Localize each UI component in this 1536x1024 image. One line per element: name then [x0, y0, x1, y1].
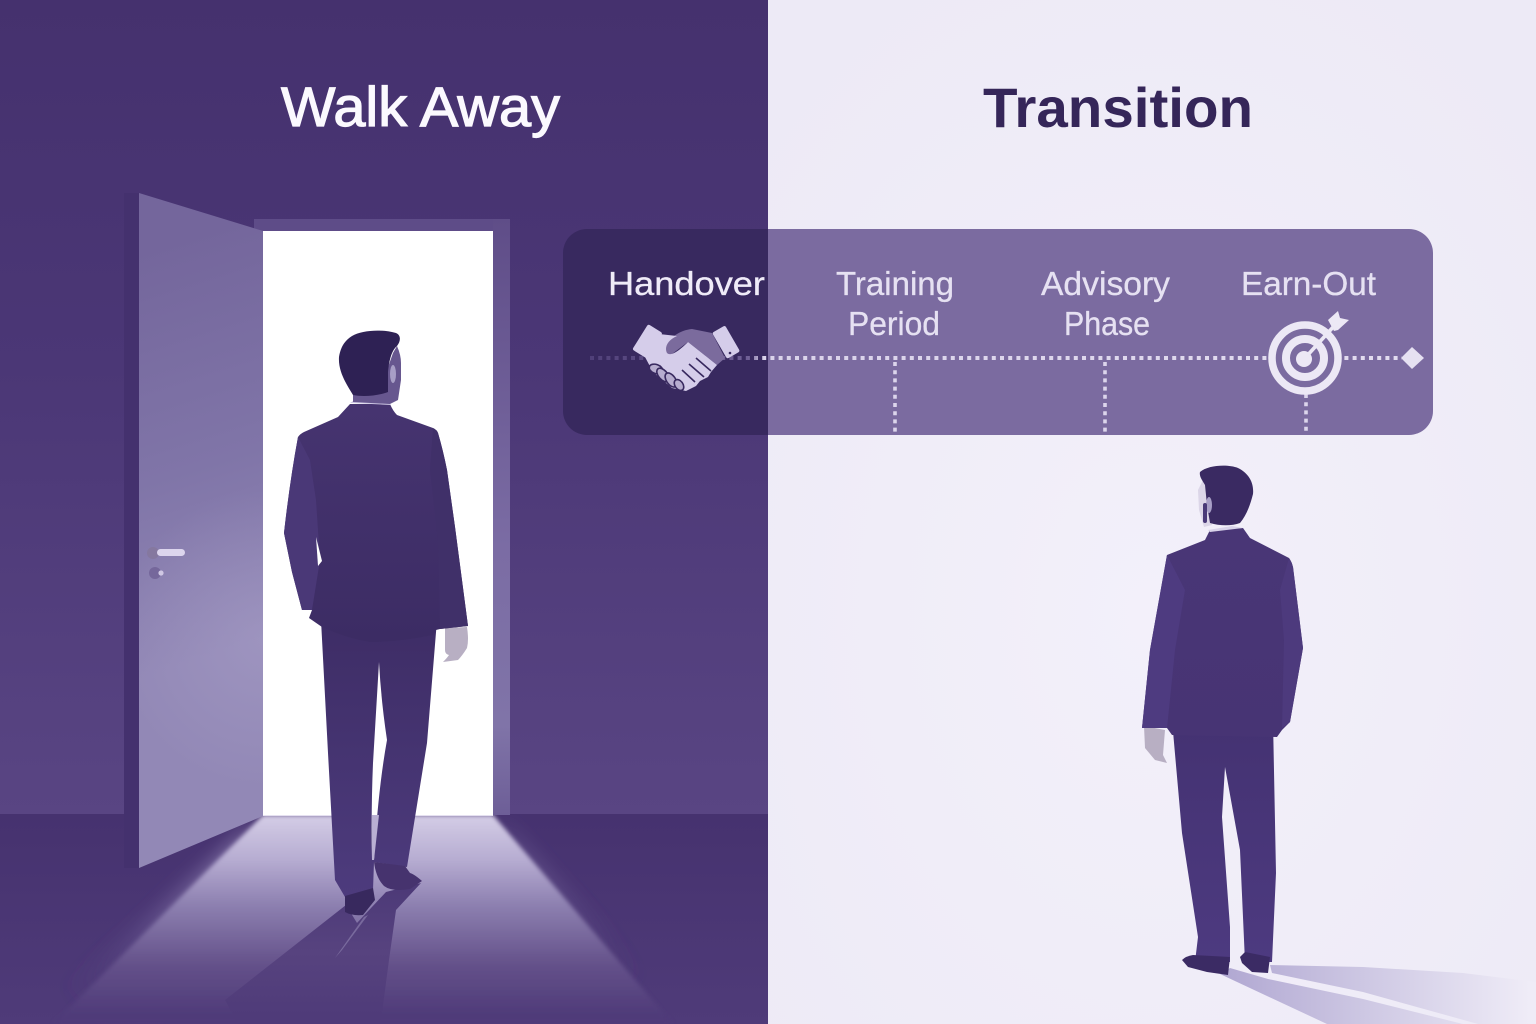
figure: man standing and looking at timeline [1142, 466, 1303, 975]
door [124, 193, 263, 868]
label: advisory phase: Phase [1064, 305, 1150, 342]
label: training period: Period [848, 305, 940, 342]
icon: handshake [632, 324, 740, 392]
floor light beam [82, 815, 646, 1000]
hand [1144, 726, 1167, 763]
hand [443, 627, 468, 662]
figure: man walking through door [284, 331, 468, 915]
lower-leg floor tone under gap [372, 815, 379, 860]
gap between legs [372, 662, 387, 860]
label: earn-out: Earn-Out [1241, 265, 1376, 302]
timeline drops [895, 362, 1306, 434]
doorway light and frame [254, 219, 510, 816]
collar [350, 401, 391, 405]
door handle [147, 547, 185, 579]
trousers [1172, 720, 1276, 962]
shadows on floor [225, 883, 421, 1024]
shoes [1182, 952, 1270, 975]
ear and sideburn [1203, 497, 1212, 523]
heading: walk away: Walk Away [281, 75, 560, 138]
label: training period [836, 265, 954, 342]
callout: transition timeline panel [563, 229, 1433, 435]
jacket [1142, 528, 1303, 737]
shoes [345, 862, 422, 915]
panel band: right light half [768, 229, 1433, 435]
label: training period: Training [836, 265, 954, 302]
panel: transition background [768, 0, 1536, 1024]
panel: walk away background [0, 0, 768, 1024]
jacket [284, 404, 468, 642]
label: advisory phase: Advisory [1041, 265, 1171, 302]
hair [1200, 466, 1253, 525]
heading: transition: Transition [983, 76, 1253, 139]
timeline dotted line [590, 356, 1402, 360]
timeline end diamond [1401, 347, 1424, 369]
collar [1208, 526, 1243, 532]
face and neck [353, 346, 401, 404]
ear [390, 365, 396, 383]
shadow: transition figure [1220, 965, 1536, 1024]
label: handover: Handover [608, 265, 765, 302]
icon: target with arrow [1272, 311, 1349, 391]
panel band: left dark half [563, 229, 768, 435]
hair [339, 331, 400, 396]
label: advisory phase [1041, 265, 1171, 342]
trousers [321, 620, 437, 897]
face and neck [1198, 478, 1212, 527]
